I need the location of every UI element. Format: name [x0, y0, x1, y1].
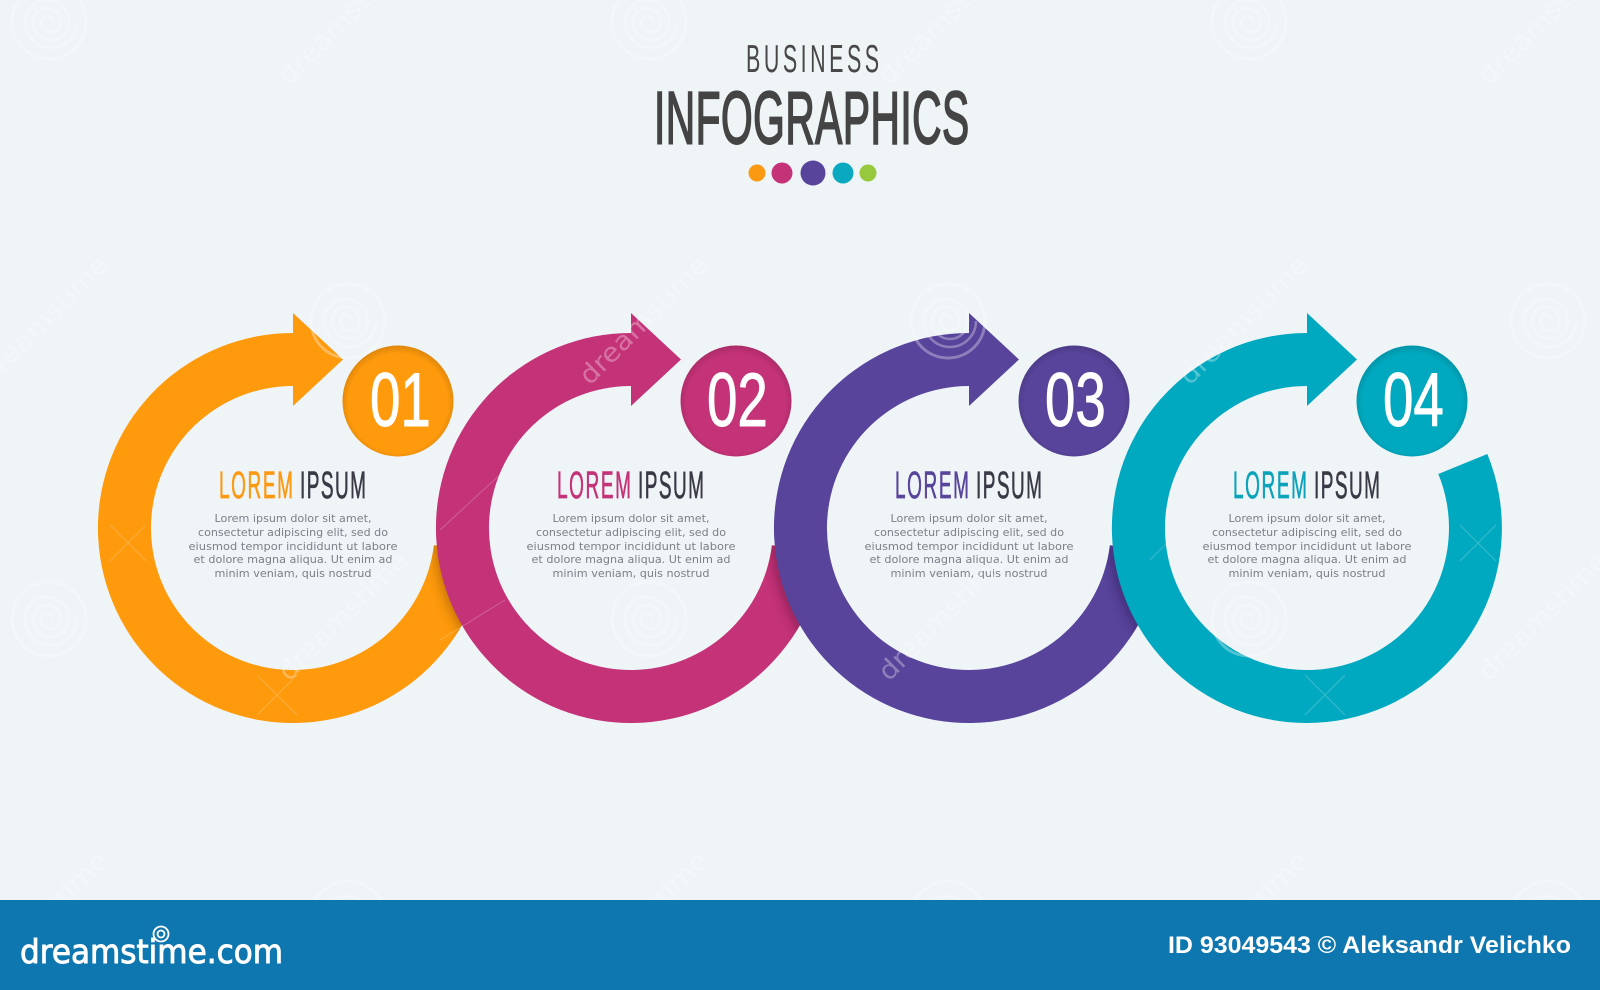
panel: step 01 — [98, 313, 486, 723]
subtitle: business: BUSINESS — [746, 37, 879, 81]
body text 02 — [526, 512, 736, 580]
body text 01: et dolore magna aliqua. Ut enim ad — [194, 553, 392, 566]
body text 04: Lorem ipsum dolor sit amet, — [1228, 512, 1386, 525]
colour dots — [748, 160, 876, 186]
heading 03: LOREM — [895, 465, 969, 507]
heading 02: IPSUM — [638, 465, 704, 507]
image credit: ID 93049543 © Aleksandr Velichko — [1168, 932, 1571, 959]
watermark overlay: dreamstime — [273, 546, 414, 687]
watermark overlay: dreamstime — [873, 546, 1014, 687]
shadow onto ring 02 — [768, 545, 800, 634]
body text 03: et dolore magna aliqua. Ut enim ad — [870, 553, 1068, 566]
shadow onto ring 01 — [430, 545, 462, 634]
heading 03 — [895, 465, 1042, 507]
icon: swirl — [154, 926, 168, 942]
title block — [654, 37, 969, 186]
badge 03 — [1018, 346, 1130, 456]
badge 04 — [1356, 346, 1468, 456]
watermark overlay: dreamstime — [574, 250, 715, 391]
badge 01 — [342, 346, 454, 456]
badge 04: 04 — [1383, 358, 1444, 443]
logo: dreamstime.com: dreamstime.com — [20, 932, 283, 971]
body text 02: Lorem ipsum dolor sit amet, — [552, 512, 710, 525]
heading: infographics: INFOGRAPHICS — [654, 77, 969, 160]
heading 01: LOREM — [219, 465, 293, 507]
body text 04: et dolore magna aliqua. Ut enim ad — [1208, 553, 1406, 566]
heading 01 — [219, 465, 366, 507]
ring arrow 01 — [98, 313, 486, 723]
badge 01: 01 — [370, 358, 431, 443]
watermark overlay: dreamstime — [574, 846, 715, 987]
body text 04 — [1202, 512, 1412, 580]
body text 03: consectetur adipiscing elit, sed do — [874, 526, 1064, 539]
heading 02: LOREM — [557, 465, 631, 507]
ring arrow 03 — [774, 313, 1162, 723]
body text 03: eiusmod tempor incididunt ut labore — [864, 540, 1074, 553]
body text 02: et dolore magna aliqua. Ut enim ad — [532, 553, 730, 566]
footer bar — [0, 900, 1600, 990]
body text 01: eiusmod tempor incididunt ut labore — [188, 540, 398, 553]
heading 04: LOREM — [1233, 465, 1307, 507]
body text 03 — [864, 512, 1074, 580]
body text 04: minim veniam, quis nostrud — [1228, 567, 1386, 580]
badge 03: 03 — [1045, 358, 1106, 443]
watermark overlay: dreamstime — [1174, 250, 1315, 391]
body text 03: Lorem ipsum dolor sit amet, — [890, 512, 1048, 525]
heading 02 — [557, 465, 704, 507]
body text 04: eiusmod tempor incididunt ut labore — [1202, 540, 1412, 553]
heading 03: IPSUM — [976, 465, 1042, 507]
body text 01: Lorem ipsum dolor sit amet, — [214, 512, 372, 525]
heading 04: IPSUM — [1314, 465, 1380, 507]
body text 01 — [188, 512, 398, 580]
badge 02 — [680, 346, 792, 456]
body text 03: minim veniam, quis nostrud — [890, 567, 1048, 580]
panel: step 04 — [1110, 313, 1502, 725]
heading 04 — [1233, 465, 1380, 507]
heading 01: IPSUM — [300, 465, 366, 507]
ring arrow 04 — [1112, 313, 1502, 723]
badge 02: 02 — [707, 358, 768, 443]
body text 02: minim veniam, quis nostrud — [552, 567, 710, 580]
panel: step 02 — [434, 313, 824, 725]
body text 01: minim veniam, quis nostrud — [214, 567, 372, 580]
ring arrow 02 — [436, 313, 824, 723]
shadow onto ring 03 — [1107, 545, 1138, 633]
body text 02: consectetur adipiscing elit, sed do — [536, 526, 726, 539]
panel: step 03 — [772, 313, 1162, 725]
body text 02: eiusmod tempor incididunt ut labore — [526, 540, 736, 553]
watermark overlay: dreamstime — [1174, 846, 1315, 987]
body text 01: consectetur adipiscing elit, sed do — [198, 526, 388, 539]
body text 04: consectetur adipiscing elit, sed do — [1212, 526, 1402, 539]
